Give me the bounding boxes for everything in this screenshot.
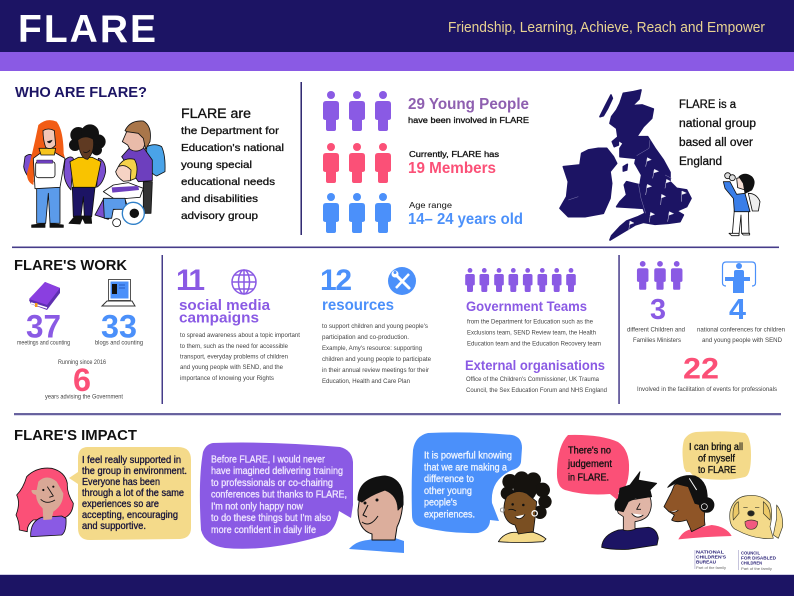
text block: national group: FLARE is a <box>679 99 737 111</box>
icons: purple people <box>323 91 391 131</box>
stat: 12 resources: in their annual review meetings for their <box>322 367 430 374</box>
stat: 4 conferences <box>697 294 785 344</box>
quote bubble: supported: experiences so are <box>82 499 159 510</box>
stat: 12 resources: to support children and young people's <box>322 323 429 330</box>
text block: FLARE are <box>181 106 284 222</box>
stat: 12 resources: participation and co-production. <box>322 334 409 341</box>
stat: 6 years <box>45 359 123 400</box>
quote bubble: before FLARE: Before FLARE, I would never <box>211 454 326 466</box>
stat: 3 ministers <box>627 294 685 344</box>
stat: 33 blogs <box>95 308 143 346</box>
quote bubble: no judgement: There's no <box>568 446 611 456</box>
icon: laptop <box>102 280 135 306</box>
portrait: woman with hair bun <box>664 476 732 539</box>
icons: blue people <box>323 193 391 233</box>
text block: external organisations: External organisations <box>465 357 605 373</box>
text block: FLARE are: FLARE are <box>181 106 251 121</box>
quote bubble: no judgement <box>557 435 629 503</box>
text block: government teams: Education team and the Education Recovery team <box>467 340 601 348</box>
quote bubble: no judgement: in FLARE. <box>568 472 609 484</box>
map: UK and Ireland with flags <box>560 90 691 240</box>
quote bubble: before FLARE: more confident in daily life <box>211 525 316 536</box>
stat: 11 social media campaigns: importance of knowing your Rights <box>180 375 275 382</box>
quote bubble: powerful: other young <box>424 486 472 497</box>
stat: 33 blogs: 33 <box>101 308 137 344</box>
stat: 22 events <box>637 352 778 393</box>
stat: 29 young people <box>408 96 529 125</box>
text block: FLARE are: Education's national <box>181 142 284 154</box>
quote bubble: powerful: people's <box>424 498 457 508</box>
quote bubble: bring all of myself: to FLARE <box>698 465 736 476</box>
stat: 12 resources: resources <box>322 297 394 314</box>
header banner <box>0 0 794 71</box>
logo: National Children's Bureau: BUREAU <box>696 559 716 564</box>
stat: 6 years: years advising the Government <box>45 394 123 400</box>
portrait: man with spiky hair <box>602 472 658 549</box>
heading: FLARE's impact: FLARE'S IMPACT <box>14 428 137 444</box>
stat: 37 meetings: 37 <box>26 308 61 344</box>
title: FLARE <box>18 8 156 51</box>
quote bubble: before FLARE <box>200 442 353 549</box>
icon: speaker at podium <box>722 262 756 293</box>
stat: age range: 14– 24 years old <box>408 211 523 228</box>
logo: Council for Disabled Children: COUNCIL <box>741 550 760 555</box>
stat: 19 members: 19 Members <box>408 160 496 177</box>
logo: National Children's Bureau: Part of the family <box>696 565 726 570</box>
quote bubble: before FLARE: I'm not only happy now <box>211 502 304 512</box>
quote bubble: supported: accepting, encouraging <box>82 510 178 521</box>
text block: FLARE are: educational needs <box>181 176 275 188</box>
stat: 11 social media campaigns <box>176 264 300 382</box>
text block: external organisations: Council, the Sex Education Forum and NHS England <box>466 387 607 394</box>
stat: age range <box>408 201 523 228</box>
stat: 12 resources: Education, Health and Care Plan <box>322 378 410 385</box>
portrait: woman with curly hair <box>498 471 552 542</box>
portrait: man in blue shirt <box>349 476 404 553</box>
quote bubble: bring all of myself <box>682 431 751 480</box>
text block: FLARE are: and disabilities <box>181 193 258 205</box>
quote bubble: bring all of myself: of myself <box>698 454 735 464</box>
icon: diary <box>29 282 60 310</box>
quote bubble: bring all of myself: I can bring all <box>689 442 743 453</box>
illustration: person with binoculars <box>723 173 760 236</box>
stat: 11 social media campaigns: to them, such as the need for accessible <box>180 343 288 350</box>
quote bubble: no judgement: judgement <box>567 459 612 470</box>
text block: government teams: Exclusions team, SEND Review team, the Health <box>467 330 596 336</box>
text block: national group <box>679 99 756 168</box>
logo: National Children's Bureau: NATIONAL <box>696 550 724 554</box>
stat: 12 resources <box>320 264 431 385</box>
text block: government teams: Government Teams <box>466 298 587 314</box>
quote bubble: powerful: that we are making a <box>424 462 507 474</box>
quote bubble: supported: Everyone has been <box>82 477 160 488</box>
icon: globe <box>232 270 256 294</box>
text block: external organisations <box>465 357 607 394</box>
stat: 22 events: 22 <box>683 352 719 386</box>
stat: 4 conferences: 4 <box>729 294 746 326</box>
stat: age range: Age range <box>409 201 453 210</box>
icon: tools <box>388 267 416 295</box>
stat: 29 young people: have been involved in FLARE <box>408 116 529 125</box>
quote bubble: before FLARE: to professionals or co-chairing <box>211 478 333 489</box>
quote bubble: before FLARE: conferences but thanks to FLARE, <box>211 490 347 500</box>
text block: government teams: from the Department for Education such as the <box>467 318 593 326</box>
stat: 19 members: Currently, FLARE has <box>409 150 499 159</box>
portrait: woman with pink hair <box>16 468 73 537</box>
logo: National Children's Bureau <box>694 550 726 570</box>
logo: Council for Disabled Children: Part of the family <box>741 566 772 571</box>
stat: 11 social media campaigns: and young people with SEND, and the <box>180 364 283 371</box>
stat: 37 meetings <box>17 308 70 346</box>
text block: government teams <box>466 298 601 348</box>
quote bubble: before FLARE: have imagined delivering training <box>211 466 343 477</box>
quote bubble: supported: I feel really supported in <box>82 455 181 466</box>
stat: 3 ministers: Families Ministers <box>633 337 682 344</box>
stat: 6 years: Running since 2016 <box>58 359 106 366</box>
logo: Council for Disabled Children: CHILDREN <box>741 560 762 566</box>
quote bubble: supported: through a lot of the same <box>82 488 184 499</box>
stat: 33 blogs: blogs and counting <box>95 340 143 346</box>
quote bubble: supported: and supportive. <box>82 521 146 532</box>
quote bubble: powerful: It is powerful knowing <box>424 450 512 462</box>
icons: three ministers <box>637 261 682 290</box>
text block: external organisations: Office of the Children's Commissioner, UK Trauma <box>466 376 599 383</box>
text block: national group: England <box>679 156 722 168</box>
stat: 12 resources: Example, Amy's resource: supporting <box>322 345 422 352</box>
footer band <box>0 574 794 596</box>
icons: eight small people <box>465 268 576 292</box>
stat: 3 ministers: different Children and <box>627 326 685 334</box>
stat: 6 years: 6 <box>73 362 91 398</box>
tagline: Friendship, Learning, Achieve, Reach and Empower <box>448 20 765 36</box>
quote bubble: supported <box>69 447 191 540</box>
stat: 11 social media campaigns: transport, everyday problems of children <box>180 354 288 360</box>
quote bubble: supported: the group in environment. <box>82 466 187 477</box>
quote bubble: powerful <box>412 432 522 533</box>
icons: pink people <box>323 143 391 183</box>
stat: 19 members <box>408 150 499 177</box>
stat: 11 social media campaigns: campaigns <box>179 310 259 326</box>
stat: 12 resources: children and young people to participate <box>322 356 431 363</box>
stat: 29 young people: 29 Young People <box>408 96 529 113</box>
logo: Council for Disabled Children: FOR DISABLED <box>741 555 777 560</box>
text block: national group: based all over <box>679 137 753 149</box>
stat: 4 conferences: and young people with SEND <box>702 337 782 344</box>
stat: 22 events: Involved in the facilitation of events for professionals <box>637 386 778 393</box>
stat: 11 social media campaigns: social media <box>179 297 271 314</box>
heading: who are FLARE: WHO ARE FLARE? <box>15 84 147 101</box>
stat: 37 meetings: meetings and counting <box>17 340 70 346</box>
text block: national group: national group <box>679 118 756 130</box>
text block: FLARE are: advisory group <box>181 210 258 222</box>
logo: Council for Disabled Children <box>738 550 777 571</box>
quote bubble: before FLARE: to do these things but I'm also <box>211 513 331 524</box>
stat: 4 conferences: national conferences for children <box>697 326 785 334</box>
stat: 11 social media campaigns: 11 <box>176 264 205 297</box>
heading: FLARE's work: FLARE'S WORK <box>14 257 127 274</box>
illustration: golden dog <box>730 495 783 539</box>
stat: 11 social media campaigns: to spread awareness about a topic important <box>180 332 300 339</box>
stat: 12 resources: 12 <box>320 264 352 297</box>
stat: 3 ministers: 3 <box>650 294 666 326</box>
quote bubble: powerful: experiences. <box>424 510 475 520</box>
text block: FLARE are: young special <box>181 159 252 171</box>
logo: National Children's Bureau: CHILDREN'S <box>696 554 726 560</box>
illustration: group of young people <box>24 120 165 227</box>
quote bubble: powerful: difference to <box>424 474 474 485</box>
text block: FLARE are: the Department for <box>181 125 280 137</box>
